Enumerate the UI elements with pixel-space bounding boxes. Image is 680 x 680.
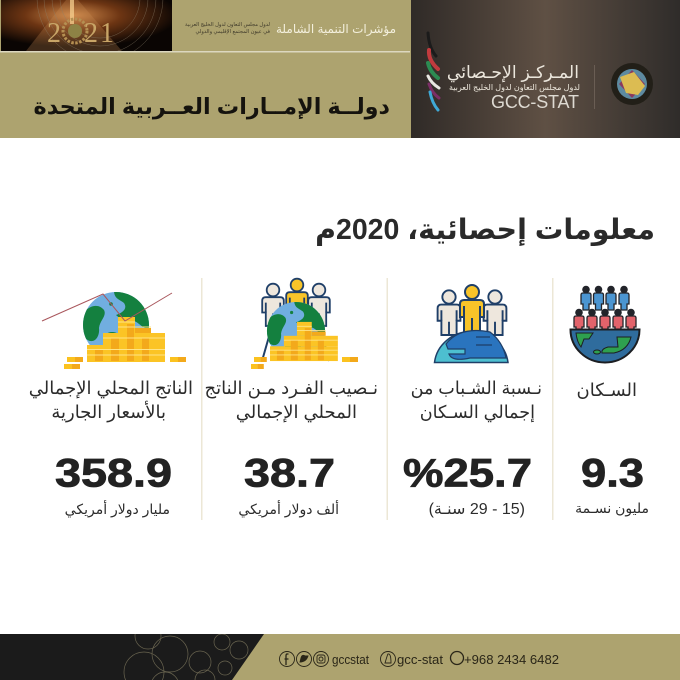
icon: people, globe and coins (251, 279, 358, 369)
unit: GDP: مليار دولار أمريكي (65, 500, 170, 518)
footer pattern (124, 634, 248, 680)
unit: population: مليون نسـمة (575, 500, 649, 517)
subtitle text: مؤشرات التنمية الشاملة (276, 22, 396, 37)
label: GDP: بالأسعار الجارية (51, 401, 166, 422)
label: youth share (411, 378, 542, 423)
column: GDP per capita (205, 279, 378, 518)
column: population (570, 286, 649, 517)
logo ribbon (428, 33, 439, 110)
subtitle text (185, 22, 396, 37)
column: youth share (403, 285, 542, 518)
GCC-STAT brand panel (411, 0, 680, 138)
subtitle text: في عيون المجتمع الإقليمي والدولي (195, 29, 271, 35)
icon: people on globe (570, 286, 640, 363)
main title: دولــة الإمــارات العــربية المتحدة (34, 94, 390, 120)
label: youth share: نـسبة الشـباب من (411, 378, 542, 399)
footer (0, 634, 680, 680)
header band (0, 0, 680, 138)
column: GDP (29, 291, 193, 518)
value: GDP per capita: 38.7 (244, 452, 335, 496)
phone: +968 2434 6482 (464, 653, 559, 667)
label: population: السـكان (577, 380, 637, 400)
label: youth share: إجمالي السـكان (420, 402, 535, 423)
label: GDP per capita (205, 378, 378, 423)
label: GDP: الناتج المحلي الإجمالي (29, 378, 193, 399)
icon: globe, coins and trend line (42, 291, 186, 369)
emblem (611, 63, 653, 105)
icon: people on dome (434, 285, 508, 362)
value: GDP: 358.9 (55, 452, 172, 496)
brand name latin: GCC-STAT (491, 92, 579, 112)
banner image: 2021: 21 (84, 18, 116, 49)
subtitle text: لدول مجلس التعاون لدول الخليج العربية (185, 22, 270, 28)
column dividers (201, 278, 554, 520)
label: GDP per capita: نـصيب الفـرد مـن الناتج (205, 378, 378, 399)
banner image: 2021: 2 (47, 18, 61, 49)
section heading: معلومات إحصائية، 2020م (315, 214, 655, 247)
label: GDP per capita: المحلي الإجمالي (236, 402, 357, 423)
unit: youth share: (15 - 29 سنـة) (429, 501, 525, 518)
social icons (280, 652, 464, 666)
value: population: 9.3 (581, 452, 644, 496)
unit: GDP per capita: ألف دولار أمريكي (238, 500, 339, 518)
brand name arabic: المـركـز الإحـصائي (447, 62, 579, 83)
handle: gcc-stat: gcc-stat (397, 653, 444, 667)
label: GDP (29, 378, 193, 422)
banner image: 2021 (1, 0, 172, 51)
value: youth share: %25.7 (403, 452, 532, 496)
handle: gccstat: gccstat (332, 653, 369, 667)
brand tagline: لدول مجلس التعاون لدول الخليج العربية (449, 83, 580, 92)
